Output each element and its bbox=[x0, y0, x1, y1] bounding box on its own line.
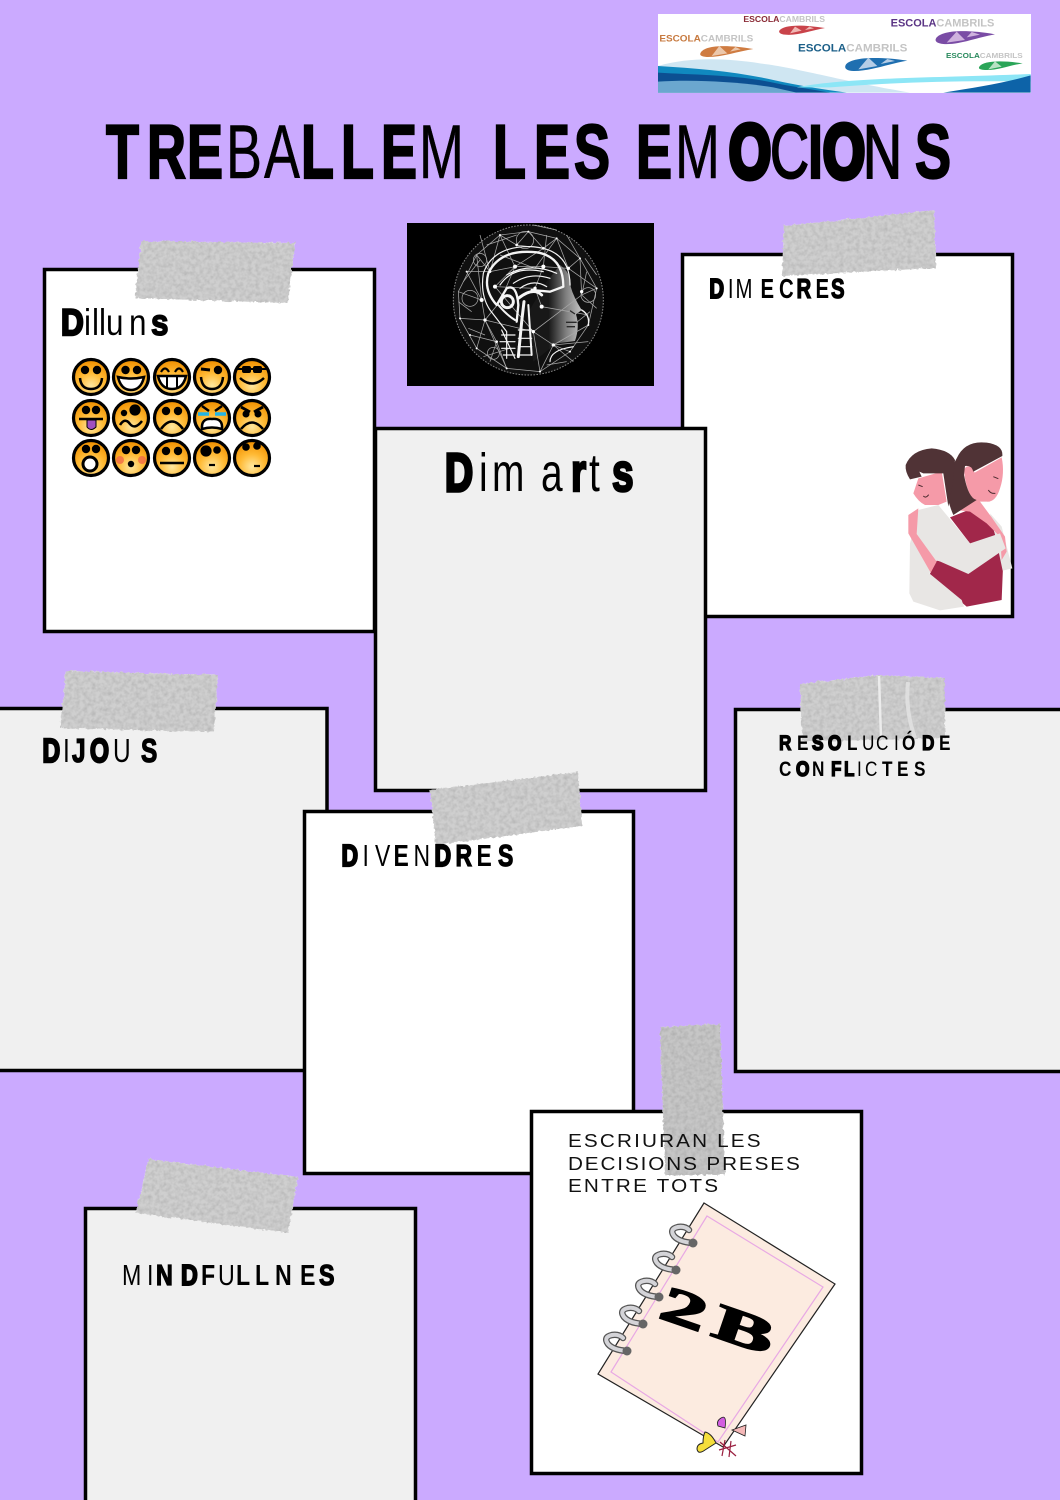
tape: Dimecres bbox=[782, 210, 936, 276]
icons: emoji grid bbox=[74, 360, 270, 476]
icon: tongue bbox=[74, 400, 108, 436]
title: A bbox=[264, 109, 300, 194]
title: R bbox=[147, 109, 186, 194]
heading: Dimarts: Dimarts bbox=[445, 442, 634, 502]
icon: teeth grin bbox=[154, 360, 190, 394]
icon: neutral bbox=[154, 440, 190, 476]
icon: angry bbox=[234, 400, 270, 436]
panel: Dimarts bbox=[376, 428, 706, 790]
logo: Escola Cambrils banner: ESCOLACAMBRILS bbox=[891, 17, 994, 29]
title: E bbox=[534, 109, 570, 194]
title: E bbox=[187, 109, 223, 194]
tape: Dilluns bbox=[135, 241, 295, 303]
title: B bbox=[226, 109, 262, 194]
icon: big smile bbox=[114, 360, 148, 394]
tape: Mindfullnes bbox=[136, 1159, 298, 1233]
panel: Resolució de conflictes bbox=[736, 675, 1060, 1072]
heading: Dilluns: Dilluns bbox=[61, 303, 168, 344]
logo: Escola Cambrils banner: ESCOLACAMBRILS bbox=[743, 15, 826, 24]
title: N bbox=[863, 109, 902, 194]
title: E bbox=[381, 109, 417, 194]
title: M bbox=[419, 109, 464, 194]
icon: blushing bbox=[114, 440, 148, 476]
title: I bbox=[808, 109, 823, 194]
icon: looking up bbox=[194, 440, 230, 476]
title: O bbox=[823, 109, 865, 194]
title: M bbox=[675, 109, 720, 194]
title: E bbox=[636, 109, 672, 194]
heading: Mindfullnes: MIN DFULLN ES bbox=[122, 1258, 334, 1292]
icon: confused bbox=[114, 400, 148, 436]
heading: Resolució de conflictes: CON FLICTES bbox=[779, 757, 925, 782]
title: L bbox=[341, 109, 374, 194]
title: T bbox=[106, 109, 139, 194]
tape: Divendres bbox=[430, 772, 582, 845]
icon: sad bbox=[154, 400, 190, 436]
logo: Escola Cambrils banner: ESCOLACAMBRILS bbox=[659, 34, 753, 44]
panel: Escriuran les decisions bbox=[532, 1024, 862, 1474]
title: S bbox=[915, 109, 951, 194]
text: decisions: ENTRE TOTS bbox=[568, 1176, 718, 1197]
heading: Dijous: DIJOU S bbox=[42, 734, 157, 770]
image: brain and head network bbox=[407, 223, 654, 386]
panel: Dimecres bbox=[682, 210, 1012, 616]
icon: crying bbox=[194, 400, 230, 436]
logo: Escola Cambrils banner bbox=[658, 14, 1031, 93]
icon: notebook 2B bbox=[598, 1203, 835, 1457]
panel: Mindfullnes bbox=[86, 1159, 416, 1500]
heading: Resolució de conflictes bbox=[779, 729, 951, 782]
tape: Dijous bbox=[60, 671, 218, 732]
heading: Resolució de conflictes: R ESO LUCIÓ DE bbox=[779, 729, 951, 756]
panel: Divendres bbox=[304, 772, 634, 1174]
logo: Escola Cambrils banner: ESCOLACAMBRILS bbox=[798, 43, 907, 55]
icon: notebook 2B: 2B bbox=[653, 1276, 782, 1366]
icon: two women hugging bbox=[906, 442, 1012, 610]
icon: smile bbox=[74, 360, 108, 394]
text: decisions: ESCRIURAN LES bbox=[568, 1131, 761, 1152]
icon: sunglasses bbox=[234, 360, 270, 394]
icon: shouting bbox=[74, 440, 108, 476]
text: decisions: DECISIONS PRESES bbox=[568, 1154, 800, 1175]
title: S bbox=[574, 109, 610, 194]
logo: Escola Cambrils banner: ESCOLACAMBRILS bbox=[946, 51, 1023, 60]
title: L bbox=[493, 109, 526, 194]
title: O bbox=[729, 109, 771, 194]
tape: Escriuran bbox=[660, 1024, 725, 1175]
title: C bbox=[770, 109, 809, 194]
text: decisions bbox=[568, 1131, 800, 1197]
heading: Divendres: DIVENDRES bbox=[342, 838, 513, 873]
panel: Dijous bbox=[0, 671, 327, 1070]
panel: Dilluns bbox=[44, 241, 374, 632]
tape: Resolució bbox=[800, 675, 945, 741]
icon: small mouth bbox=[234, 440, 270, 476]
title: L bbox=[301, 109, 334, 194]
heading: Dimecres: DIM ECRES bbox=[709, 274, 845, 305]
icon: wink bbox=[194, 360, 230, 394]
